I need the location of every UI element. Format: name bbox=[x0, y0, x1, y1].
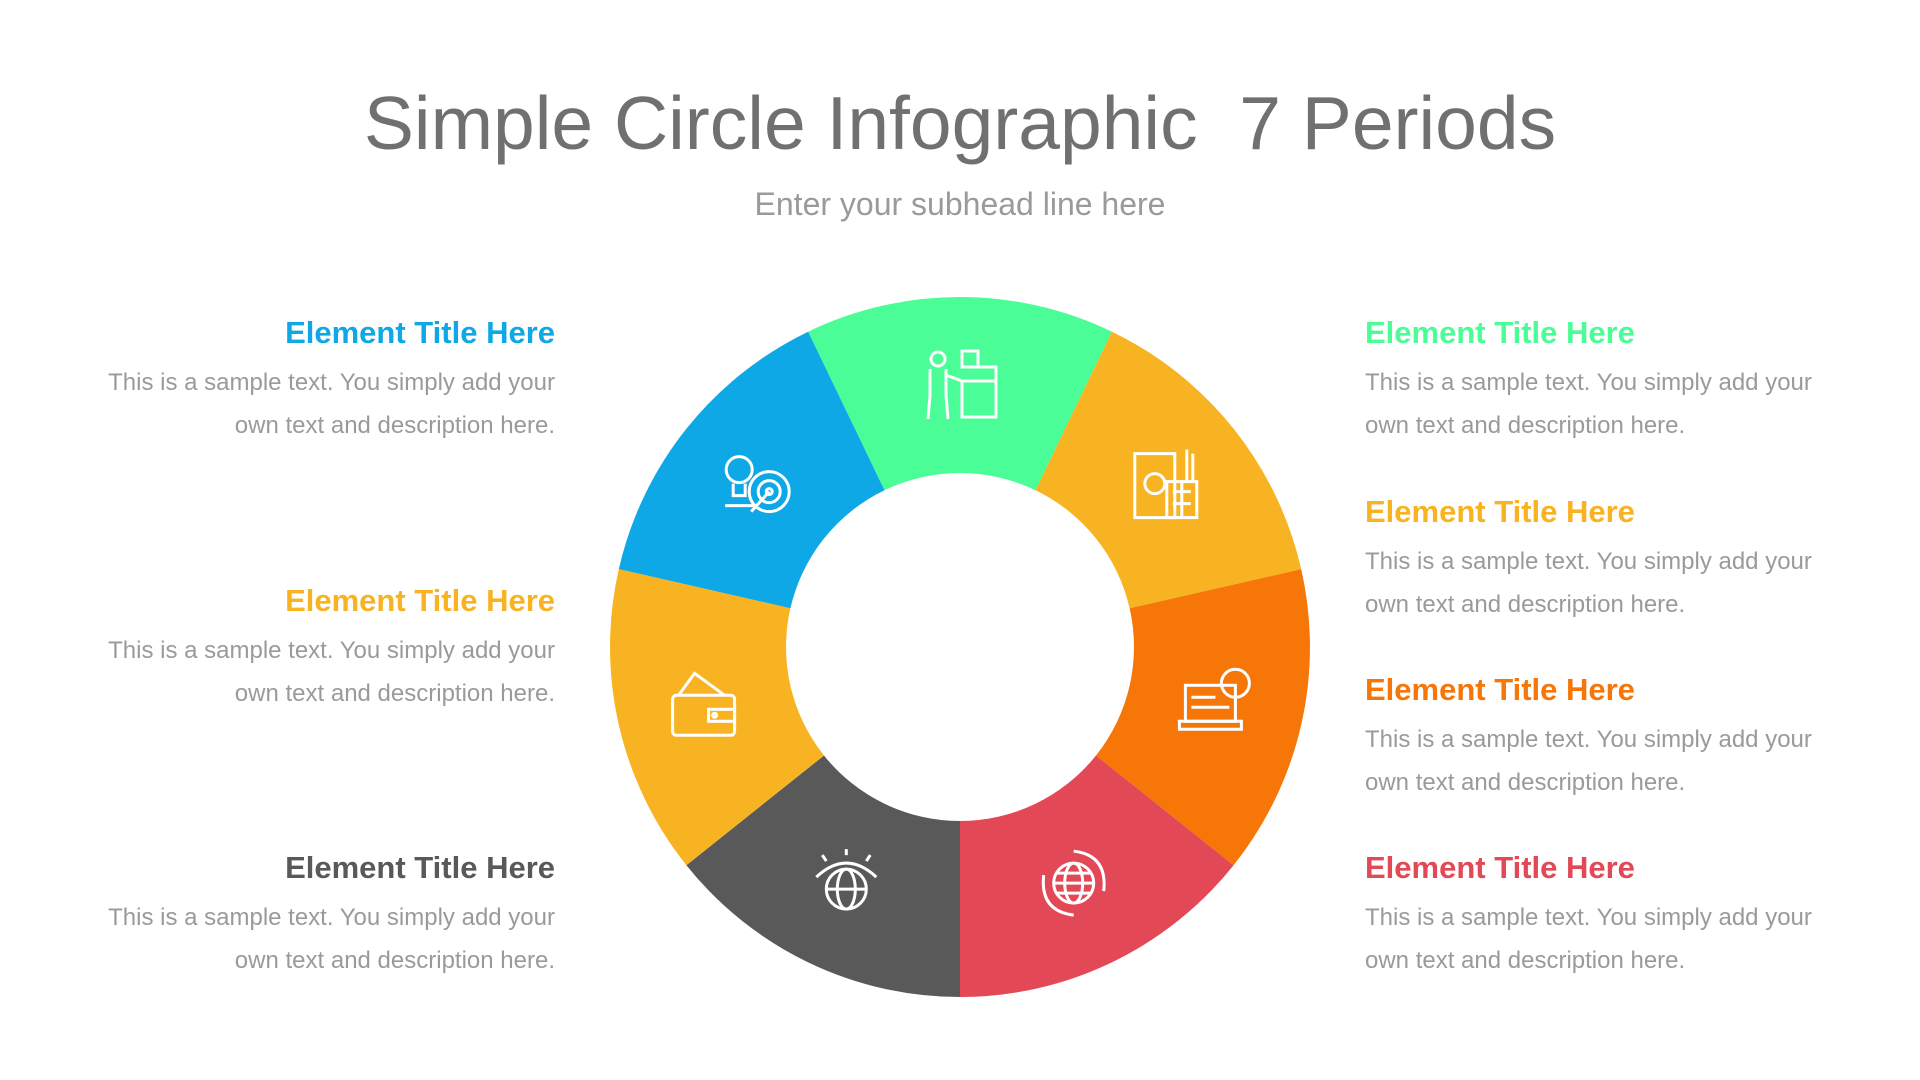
segment: yellow right bbox=[1036, 332, 1301, 608]
left item 3 bbox=[108, 850, 555, 974]
icon: puzzle person bbox=[928, 351, 996, 419]
text: This is a sample text. You simply add your own text and description here. bbox=[1365, 369, 1812, 439]
segment: orange bbox=[1096, 569, 1310, 865]
left item 2 bbox=[108, 583, 555, 707]
text: Element Title Here bbox=[1365, 315, 1635, 350]
right item 4 bbox=[1365, 850, 1812, 974]
left item 1 bbox=[108, 315, 555, 439]
text: Element Title Here bbox=[285, 850, 555, 885]
text: This is a sample text. You simply add your own text and description here. bbox=[1365, 904, 1812, 974]
subhead: Enter your subhead line here bbox=[755, 186, 1165, 222]
segment: blue bbox=[619, 332, 884, 608]
text: This is a sample text. You simply add your own text and description here. bbox=[108, 904, 555, 974]
right item 1 bbox=[1365, 315, 1812, 439]
text: This is a sample text. You simply add your own text and description here. bbox=[1365, 548, 1812, 618]
title: Simple Circle Infographic 7 Periods bbox=[364, 81, 1556, 165]
segment: gray bbox=[686, 756, 960, 997]
segment: yellow left bbox=[610, 569, 824, 865]
text: Element Title Here bbox=[1365, 494, 1635, 529]
icon: globe with eye bbox=[816, 849, 876, 909]
text: This is a sample text. You simply add your own text and description here. bbox=[108, 637, 555, 707]
segment: red bbox=[960, 756, 1234, 997]
text: This is a sample text. You simply add your own text and description here. bbox=[108, 369, 555, 439]
icon: finance documents bbox=[1135, 450, 1197, 518]
icon: wallet bbox=[673, 673, 735, 735]
text: Element Title Here bbox=[1365, 672, 1635, 707]
segment: green bbox=[808, 297, 1112, 490]
icon: globe in hands bbox=[1043, 851, 1104, 915]
right item 2 bbox=[1365, 494, 1812, 618]
right item 3 bbox=[1365, 672, 1812, 796]
icon: idea target bbox=[725, 457, 789, 512]
text: Element Title Here bbox=[285, 315, 555, 350]
text: Element Title Here bbox=[285, 583, 555, 618]
text: This is a sample text. You simply add your own text and description here. bbox=[1365, 726, 1812, 796]
icon: laptop refresh bbox=[1179, 669, 1249, 729]
text: Element Title Here bbox=[1365, 850, 1635, 885]
